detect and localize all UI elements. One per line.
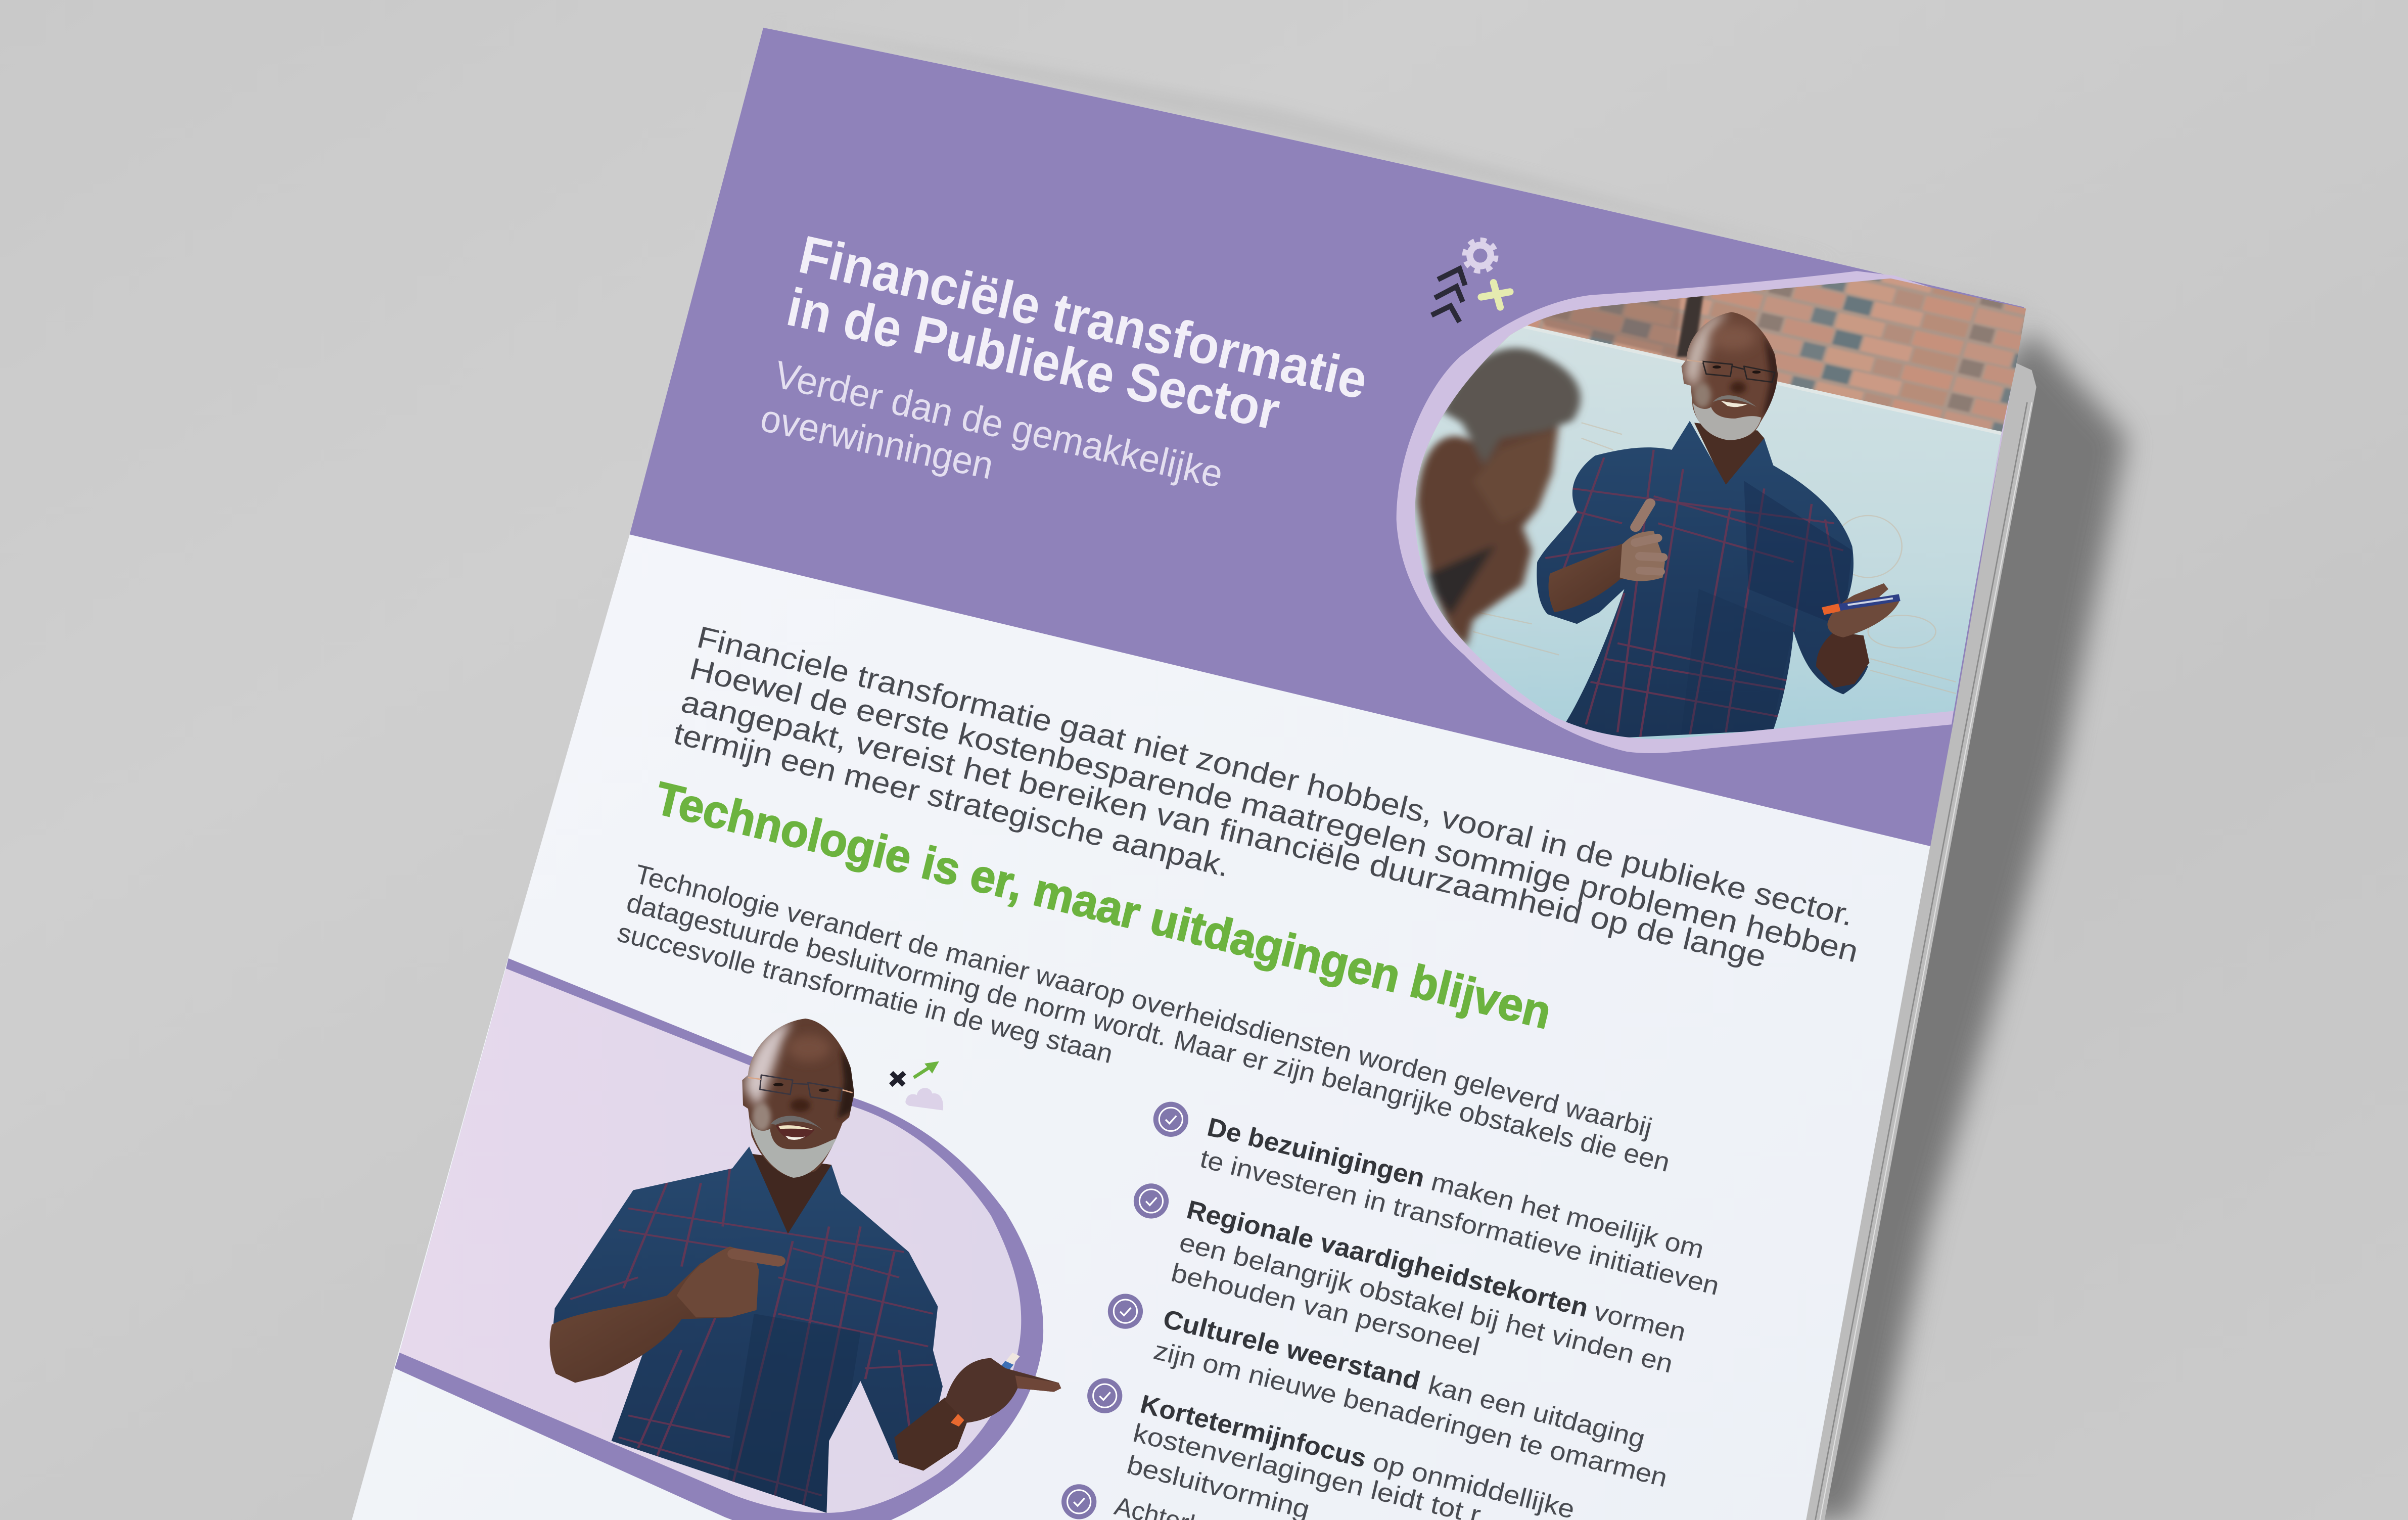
list item: kortetermijnfocus: besluitvorming: [1124, 1450, 1313, 1520]
presenter head: [1682, 310, 1780, 440]
man: beard: [750, 1119, 837, 1178]
man: marker: [955, 1354, 1016, 1424]
list item: weerstand: [1108, 1294, 1671, 1493]
man: right hand: [945, 1358, 1061, 1423]
man: shirt plaid: [570, 1168, 933, 1510]
presenter eyes: [1712, 365, 1761, 374]
list item: weerstand: zijn om nieuwe benaderingen te omarmen: [1151, 1335, 1671, 1493]
presenter right arm: [1816, 632, 1869, 688]
list item: vaardigheidstekorten: vormen: [1591, 1296, 1689, 1347]
presenter beard: [1693, 403, 1762, 440]
presenter glasses: [1687, 360, 1775, 382]
man: glasses: [748, 1075, 853, 1101]
man: eyes: [773, 1083, 829, 1092]
brick wall: [1410, 272, 2042, 465]
presenter moustache: [1713, 395, 1756, 407]
icon: plus: [1481, 283, 1510, 307]
heading: technology: Technologie is er, maar uitdagingen blijven: [651, 772, 1556, 1039]
man: pointing hand: [677, 1247, 778, 1317]
man: mouth: [776, 1125, 815, 1140]
faint board notes: [1473, 423, 1956, 694]
icon: cloud: [905, 1088, 943, 1111]
panel: lower photo blob: [395, 958, 1061, 1520]
icon: arrow up: [914, 1061, 939, 1078]
subtitle: overwinningen: [757, 396, 997, 488]
icon: check bullet: [1134, 1183, 1169, 1219]
list item: kortetermijnfocus: op onmiddellijke: [1370, 1447, 1578, 1520]
photo frame ring: [1397, 271, 2024, 753]
bullet list: [1061, 1102, 1722, 1520]
list item: bezuinigingen: te investeren in transformatieve initiatieven: [1197, 1143, 1722, 1301]
purple outline: [395, 958, 1043, 1520]
title: Financiële transformatie: [794, 224, 1373, 410]
icon: chevrons: [1431, 269, 1465, 322]
icon: cross mark: [891, 1073, 905, 1085]
shirt plaid: [1545, 450, 1843, 738]
page: [352, 28, 2024, 1520]
icon: check bullet: [1061, 1484, 1096, 1519]
list item: vaardigheidstekorten: Regionale vaardigheidstekorten: [1184, 1194, 1591, 1322]
list item: bezuinigingen: [1153, 1102, 1722, 1301]
man: teeth: [778, 1125, 813, 1140]
list item: kortetermijnfocus: Kortetermijnfocus: [1138, 1389, 1369, 1473]
man: moustache: [771, 1116, 823, 1131]
list item: kortetermijnfocus: kostenverlagingen leidt tot r: [1130, 1418, 1484, 1520]
man: chest: [752, 1154, 831, 1234]
section paragraph: datagestuurde besluitvorming de norm wordt. Maar er zijn belangrijke obstakels die een: [624, 888, 1673, 1178]
man: shirt shading: [725, 1314, 860, 1517]
presenter neck: [1694, 423, 1764, 488]
list item: weerstand: kan een uitdaging: [1425, 1370, 1648, 1454]
list item: vaardigheidstekorten: [1134, 1183, 1689, 1378]
panel: purple header: [630, 28, 2024, 846]
icon: check bullet: [1087, 1378, 1122, 1413]
man: head: [742, 1019, 856, 1178]
man: shirt: [551, 1146, 943, 1513]
intro paragraph: aangepakt, vereist het bereiken van financiële duurzaamheid op de lange: [678, 684, 1770, 974]
icon: check bullet: [1153, 1102, 1188, 1137]
presenter open hand: [1827, 583, 1900, 637]
section paragraph: Technologie verandert de manier waarop overheidsdiensten worden geleverd waarbij: [632, 859, 1655, 1143]
page drop shadow: [763, 22, 2127, 1520]
shirt shading: [1681, 481, 1852, 736]
marker: [1823, 597, 1900, 611]
list item: vaardigheidstekorten: een belangrijk obstakel bij het vinden en: [1177, 1227, 1676, 1378]
photo: presenter at whiteboard: [1410, 272, 2042, 744]
presenter left arm: [1549, 539, 1654, 612]
paper stack edge: [1803, 362, 2036, 1520]
whiteboard: [1410, 325, 2006, 744]
subtitle: Verder dan de gemakkelijke: [770, 353, 1227, 496]
intro paragraph: Hoewel de eerste kostenbesparende maatregelen sommige problemen hebben: [686, 651, 1862, 969]
list item: vaardigheidstekorten: behouden van personeel: [1169, 1258, 1483, 1361]
panel: top photo blob: [1397, 271, 2042, 753]
list item: achterhaalde: [1061, 1484, 1383, 1520]
presenter mouth: [1721, 401, 1748, 407]
blurred foreground man: [1417, 348, 1581, 647]
section paragraph: succesvolle transformatie in de weg staan: [614, 917, 1116, 1069]
icon: gear: [1465, 240, 1496, 271]
intro paragraph: Financiele transformatie gaat niet zonder hobbels, vooral in de publieke sector.: [694, 620, 1857, 933]
title: in de Publieke Sector: [782, 277, 1285, 441]
list item: bezuinigingen: De bezuinigingen: [1205, 1112, 1427, 1192]
man: right arm: [894, 1397, 967, 1471]
list item: weerstand: Culturele weerstand: [1161, 1304, 1423, 1395]
intro paragraph: termijn een meer strategische aanpak.: [670, 716, 1233, 883]
presenter hand: [1620, 503, 1665, 581]
icon: check bullet: [1108, 1294, 1143, 1329]
presenter shirt: [1537, 421, 1868, 740]
lilac fill: [400, 969, 1021, 1513]
list item: bezuinigingen: maken het moeilijk om: [1428, 1167, 1707, 1264]
man: left arm: [550, 1263, 757, 1383]
list item: kortetermijnfocus: [1087, 1378, 1578, 1520]
